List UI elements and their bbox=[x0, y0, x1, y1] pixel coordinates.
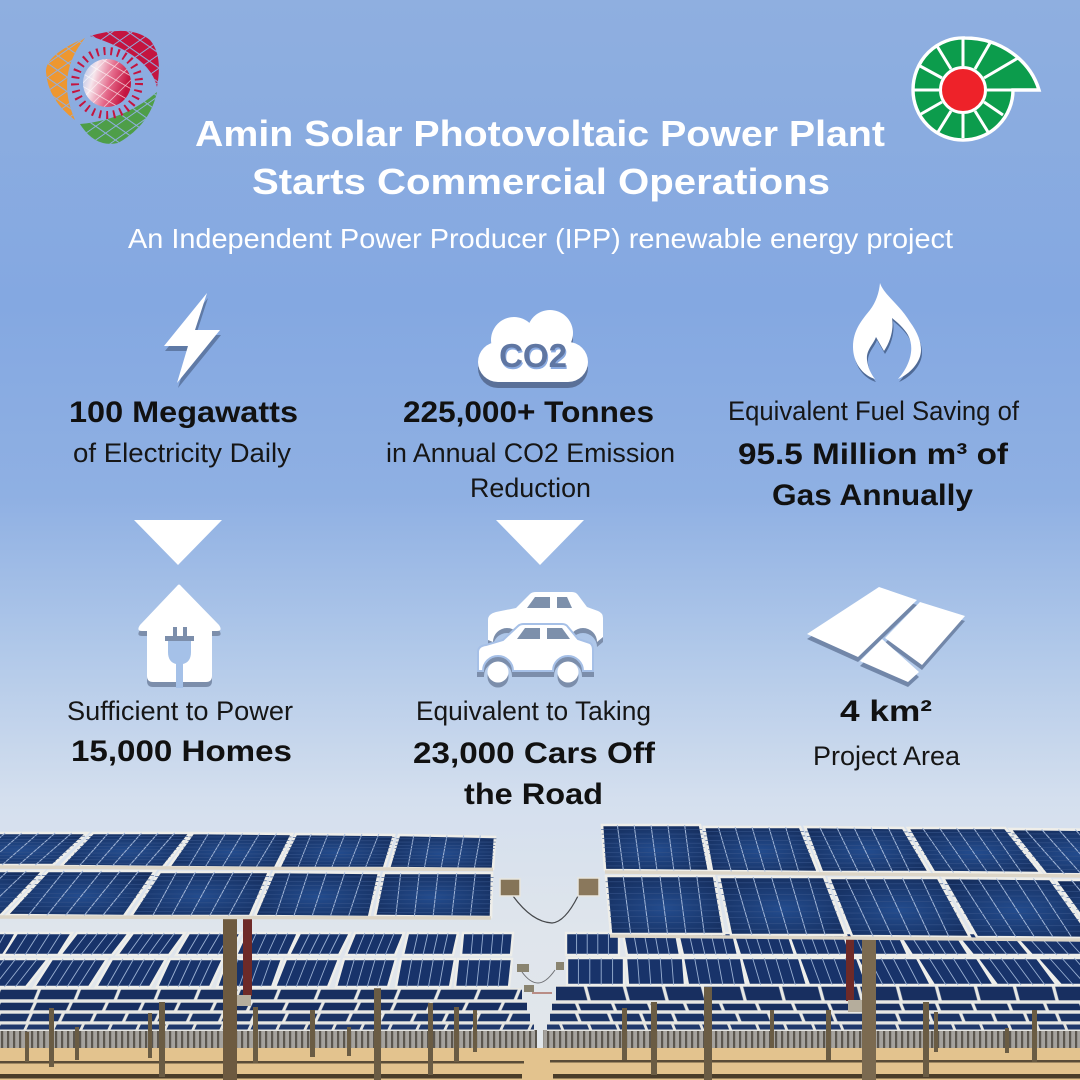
stat: 15,000 homes: 15,000 Homes bbox=[71, 735, 292, 768]
icon: lightning bolt bbox=[164, 293, 220, 383]
left middle panel rows bbox=[0, 933, 513, 987]
stat: 225,000+ tonnes: 225,000+ Tonnes bbox=[403, 396, 654, 429]
stat: 100 megawatts: 100 Megawatts bbox=[69, 396, 298, 429]
stat: fuel saving: 95.5 Million m³ of bbox=[738, 438, 1009, 471]
front right support pole bbox=[846, 936, 876, 1080]
arrow: down triangle bbox=[134, 520, 222, 565]
green band bbox=[80, 92, 157, 144]
stat: 225,000+ tonnes bbox=[386, 396, 675, 503]
junction boxes and cables bbox=[500, 878, 599, 993]
title: Amin Solar Photovoltaic Power Plant bbox=[195, 113, 885, 154]
stat: 23,000 cars bbox=[413, 696, 656, 811]
stat: 15,000 homes bbox=[67, 696, 293, 768]
photo: solar panel field bbox=[0, 825, 1080, 1080]
stat: project area: Project Area bbox=[813, 741, 961, 771]
icon: CO2 cloud: CO2 bbox=[499, 337, 567, 374]
title bbox=[195, 113, 885, 202]
icon: land plots bbox=[807, 587, 965, 682]
logo: right green and red shell emblem bbox=[913, 38, 1039, 140]
stat: 225,000+ tonnes: Reduction bbox=[470, 473, 591, 503]
stat: fuel saving: Gas Annually bbox=[772, 479, 973, 512]
stat: 15,000 homes: Sufficient to Power bbox=[67, 696, 293, 726]
front left solar array bbox=[0, 833, 497, 918]
mid-distance support posts bbox=[25, 987, 1037, 1080]
distant panel rows bbox=[0, 985, 1080, 1049]
orange band bbox=[46, 38, 85, 120]
logo: left tri-colour solar emblem bbox=[46, 31, 159, 144]
crimson band bbox=[90, 31, 159, 87]
stat: fuel saving: Equivalent Fuel Saving of bbox=[728, 396, 1019, 426]
stat: 23,000 cars: Equivalent to Taking bbox=[416, 696, 651, 726]
sand ground bbox=[0, 1048, 1080, 1080]
subtitle: An Independent Power Producer (IPP) renewable energy project bbox=[128, 223, 953, 254]
stat: fuel saving bbox=[728, 396, 1019, 512]
panel: emissions column bbox=[386, 310, 675, 811]
icon: house with plug bbox=[138, 584, 221, 688]
icon: CO2 cloud bbox=[478, 310, 588, 382]
front left support pole bbox=[223, 918, 252, 1080]
stat: 100 megawatts: of Electricity Daily bbox=[73, 438, 292, 468]
arrow: down triangle bbox=[496, 520, 584, 565]
stat: project area bbox=[813, 695, 961, 771]
icon: gas flame bbox=[853, 283, 921, 379]
sun sphere bbox=[83, 59, 131, 107]
stat: project area: 4 km² bbox=[840, 695, 932, 728]
title: Starts Commercial Operations bbox=[252, 161, 830, 202]
right middle panel rows bbox=[566, 933, 1080, 985]
panel: electricity column bbox=[67, 293, 298, 768]
front right solar array bbox=[600, 825, 1080, 940]
stat: 23,000 cars: the Road bbox=[464, 778, 603, 811]
icon: two cars bbox=[478, 592, 603, 682]
stat: 100 megawatts bbox=[69, 396, 298, 468]
stat: 225,000+ tonnes: in Annual CO2 Emission bbox=[386, 438, 675, 468]
panel: fuel and area column bbox=[728, 283, 1019, 771]
stat: 23,000 cars: 23,000 Cars Off bbox=[413, 737, 656, 770]
